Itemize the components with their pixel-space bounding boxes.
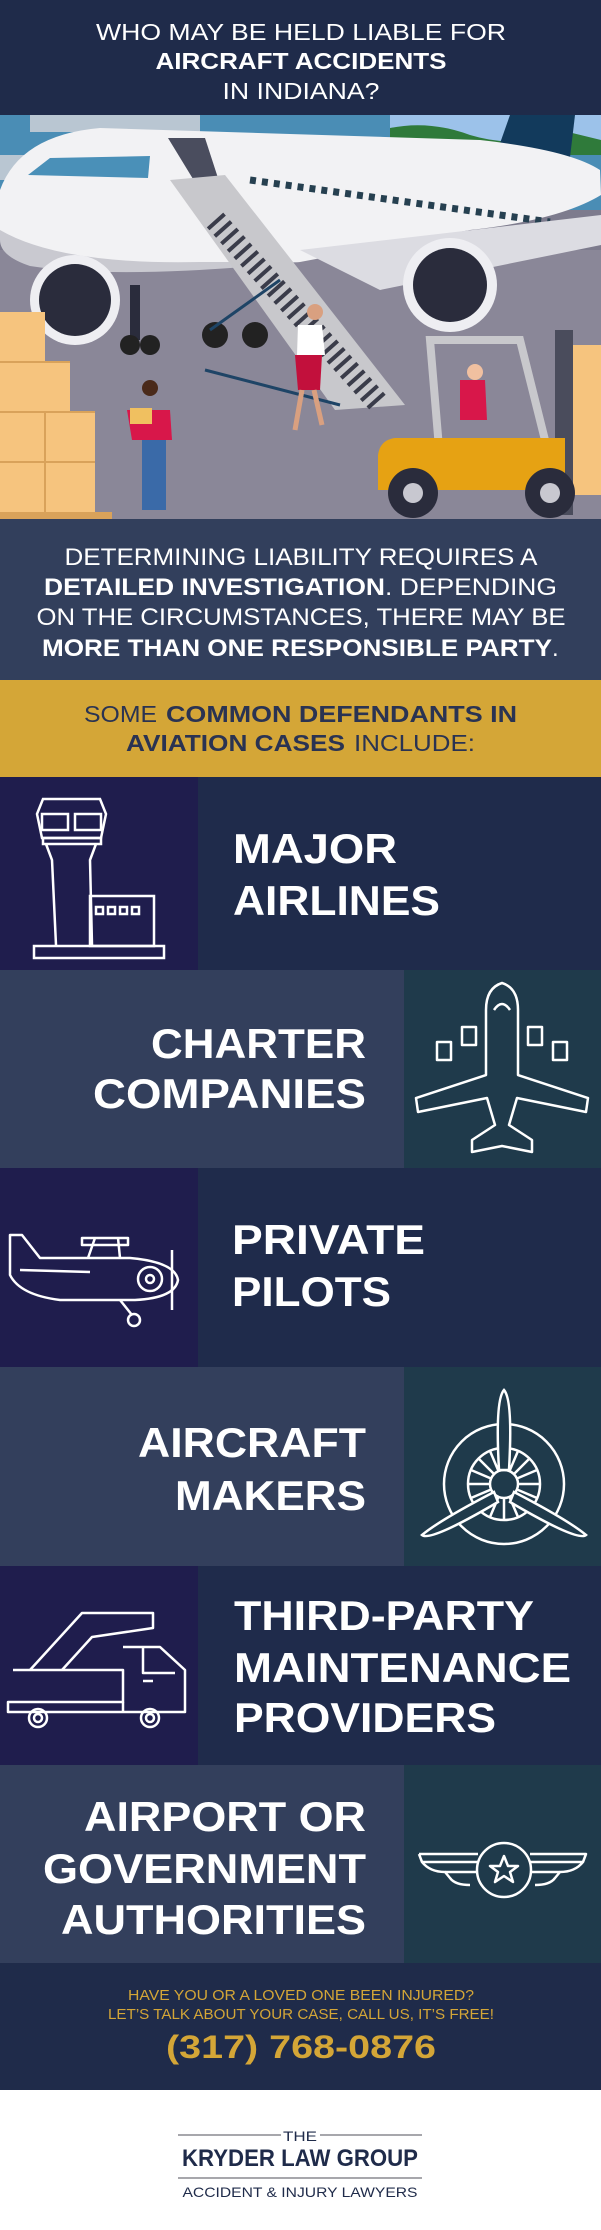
forklift	[378, 330, 601, 518]
intro text block: DETERMINING LIABILITY REQUIRES A	[64, 544, 538, 571]
row 6: airport or government authorities: GOVERNMENT	[43, 1845, 366, 1892]
logo: THE	[283, 2128, 317, 2144]
cockpit windows	[28, 156, 150, 178]
engines	[30, 255, 120, 345]
row 1: major airlines: MAJOR	[233, 825, 397, 872]
woman	[295, 304, 325, 430]
row 6: airport or government authorities: AIRPORT OR	[84, 1793, 366, 1840]
intro text block: .	[552, 635, 559, 662]
tail fin	[480, 115, 575, 200]
gold heading band	[0, 680, 601, 777]
row 2: charter companies	[0, 970, 601, 1168]
row 2: charter companies: CHARTER	[151, 1020, 366, 1067]
row 4: aircraft makers	[0, 1367, 601, 1566]
icon: radial engine propeller	[422, 1390, 586, 1544]
row 3: private pilots: PRIVATE	[232, 1216, 425, 1263]
boxes	[0, 312, 45, 362]
intro text block: ON THE CIRCUMSTANCES, THERE MAY BE	[36, 604, 566, 631]
intro text block: DETAILED INVESTIGATION	[44, 574, 385, 601]
icon: control tower	[34, 799, 164, 958]
worker with clipboard	[127, 380, 172, 510]
title: IN INDIANA?	[222, 78, 380, 104]
gold heading band: SOME	[84, 701, 157, 727]
row 4: aircraft makers: AIRCRAFT	[138, 1419, 366, 1466]
call to action: LET’S TALK ABOUT YOUR CASE, CALL US, IT’S FREE!	[108, 2006, 494, 2023]
logo	[178, 2128, 422, 2200]
row 5: third-party maintenance providers	[0, 1566, 601, 1765]
icon: airplane	[416, 983, 588, 1152]
row 6: airport or government authorities	[0, 1765, 601, 1963]
title	[0, 0, 601, 115]
icon: stair truck	[8, 1613, 185, 1727]
cabin windows	[250, 180, 550, 222]
illustration: airport scene	[0, 115, 601, 519]
call to action	[0, 1963, 601, 2090]
intro text block: MORE THAN ONE RESPONSIBLE PARTY	[42, 635, 552, 662]
logo: ACCIDENT & INJURY LAWYERS	[182, 2184, 418, 2200]
intro text block: . DEPENDING	[385, 574, 557, 601]
row 1: major airlines	[0, 777, 601, 970]
row 3: private pilots	[0, 1168, 601, 1367]
row 2: charter companies: COMPANIES	[93, 1070, 366, 1117]
call to action: (317) 768-0876	[166, 2029, 436, 2065]
title: WHO MAY BE HELD LIABLE FOR	[96, 19, 506, 45]
gold heading band: INCLUDE:	[354, 730, 475, 756]
row 3: private pilots: PILOTS	[232, 1268, 391, 1315]
logo: KRYDER LAW GROUP	[182, 2145, 418, 2172]
row 6: airport or government authorities: AUTHORITIES	[61, 1896, 366, 1943]
gold heading band: AVIATION CASES	[126, 730, 345, 756]
door and stairs	[168, 138, 230, 215]
gold heading band: COMMON DEFENDANTS IN	[166, 701, 517, 727]
row 1: major airlines: AIRLINES	[233, 877, 440, 924]
call to action: HAVE YOU OR A LOVED ONE BEEN INJURED?	[128, 1987, 474, 2004]
icon: propeller plane	[10, 1235, 178, 1326]
row 5: third-party maintenance providers: PROVIDERS	[234, 1694, 496, 1741]
row 5: third-party maintenance providers: THIRD-PARTY	[234, 1592, 534, 1639]
row 5: third-party maintenance providers: MAINTENANCE	[234, 1644, 571, 1691]
title: AIRCRAFT ACCIDENTS	[156, 48, 446, 74]
wing	[300, 215, 601, 290]
intro text block	[0, 519, 601, 680]
row 4: aircraft makers: MAKERS	[175, 1472, 366, 1519]
landing gear	[130, 285, 140, 340]
fuselage	[0, 128, 601, 268]
icon: pilot wings badge	[419, 1843, 586, 1897]
